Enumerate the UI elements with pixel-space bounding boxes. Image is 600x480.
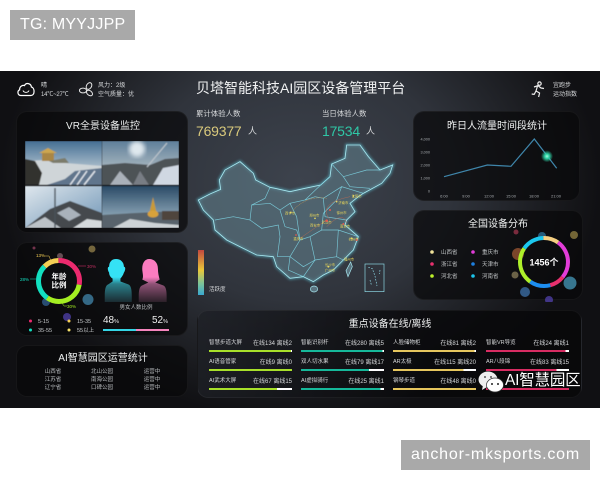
table: operations	[45, 368, 160, 391]
device rows: 在线67 离线15	[253, 379, 292, 385]
line chart: 3,000	[420, 150, 430, 154]
hot spots and labels: 南京市	[340, 223, 351, 228]
device rows: 在线81 离线2	[440, 341, 476, 347]
device rows: 在线134 离线2	[253, 341, 292, 347]
stat: cumulative visitors	[196, 109, 257, 139]
hot spots and labels: 福州市	[344, 257, 355, 262]
panel: national device distribution	[413, 210, 583, 300]
wind text: 风力：2级	[98, 83, 125, 89]
province borders	[215, 164, 380, 277]
hot spots and labels: 徐州市	[337, 210, 347, 215]
device rows: 在线115 离线20	[434, 360, 476, 366]
device rows: 智慧步道大屏	[209, 340, 242, 346]
table: operations: 运营中	[144, 369, 160, 375]
device rows: 在线9 离线0	[260, 360, 292, 366]
south china sea inset	[365, 264, 384, 292]
map of China	[196, 142, 396, 292]
heading: 全国设备分布	[468, 219, 528, 230]
line chart: 4,000	[420, 138, 430, 142]
device rows: AR太极	[393, 359, 412, 365]
device rows: 双人切水果	[301, 359, 329, 365]
stat value: 769377	[196, 123, 242, 139]
device rows: AI虚拟骑行	[301, 378, 328, 384]
heading: 昨日人流量时间段统计	[447, 121, 547, 132]
gender ratio bar	[103, 329, 169, 331]
sport index block	[532, 81, 577, 98]
line chart	[420, 138, 562, 198]
icon: fan	[79, 82, 93, 96]
line chart: 0	[428, 190, 430, 194]
icon: runner	[532, 81, 544, 98]
panel: yesterday traffic	[413, 111, 580, 201]
photo: golden pagoda	[102, 186, 179, 228]
female percent: 52%	[152, 315, 168, 326]
dashboard screen	[0, 71, 600, 408]
device rows: 智能识别杆	[301, 340, 329, 346]
watermark: WeChat AI智慧园区	[478, 372, 580, 392]
hot spots and labels: 济南市	[338, 200, 349, 205]
table: operations: 口碑公园	[91, 385, 113, 391]
chart: age donut with bubbles	[20, 246, 96, 321]
icon: WeChat bubbles	[478, 372, 504, 392]
table: operations: 山西省	[45, 369, 61, 375]
panel: operations statistics	[16, 345, 188, 397]
icon: cloud	[17, 82, 35, 96]
stat label: 当日体验人数	[322, 109, 366, 118]
hot spots and labels: 郑州市	[309, 213, 320, 218]
hot spots and labels	[285, 193, 362, 272]
device rows: 钢琴步道	[393, 378, 415, 384]
tag: TG label: TG: MYYJJPP	[20, 16, 125, 33]
device rows: AI语音管家	[209, 359, 236, 365]
device rows: AR八段锦	[486, 359, 510, 365]
legend	[430, 248, 499, 280]
heading: 重点设备在线/离线	[349, 319, 431, 330]
activity legend bar	[198, 250, 204, 295]
hot spots and labels: 沈阳市	[352, 193, 362, 198]
hot spots and labels: 广州市	[325, 267, 336, 272]
hot spots and labels: 重庆市	[293, 236, 304, 241]
hot spots and labels: 长沙市	[325, 262, 336, 267]
stat unit: 人	[248, 126, 257, 136]
line chart: 6:00	[440, 194, 449, 198]
panel: key device status	[197, 310, 582, 398]
device rows	[209, 338, 569, 390]
line chart: 12:00	[484, 194, 495, 198]
table: operations: 辽宁省	[45, 385, 61, 391]
photo: snowy trees	[25, 186, 102, 228]
device rows: 人脸储物柜	[393, 340, 421, 346]
legend: 山西省	[441, 248, 458, 256]
panel: age and gender ratio	[16, 242, 188, 336]
stat: daily visitors	[322, 109, 375, 139]
hot spots and labels: 西安市	[310, 223, 321, 228]
temperature: 14℃~27℃	[41, 92, 68, 98]
hainan and taiwan	[310, 262, 352, 292]
hot spots and labels: 西宁市	[285, 211, 296, 216]
age legend	[29, 319, 95, 334]
chart: age donut with bubbles: 30%	[87, 264, 96, 269]
device rows: AI武术大屏	[209, 378, 236, 384]
table: operations: 江苏省	[45, 377, 61, 383]
line chart: 2,000	[420, 164, 430, 168]
tag: site address: anchor-mksports.com	[411, 446, 580, 463]
legend: 浙江省	[441, 260, 458, 268]
device rows: 在线83 离线15	[530, 360, 569, 366]
activity legend label: 活跃度	[209, 287, 226, 293]
device rows: 智能VR导览	[486, 340, 516, 346]
table: operations: 南海公园	[91, 377, 113, 383]
gender ratio label: 男女人数比例	[119, 305, 153, 311]
line chart: 1,000	[420, 176, 430, 180]
heading: AI智慧园区运营统计	[58, 353, 148, 364]
device rows: 在线24 离线1	[533, 341, 569, 347]
hot spots and labels: 杭州市	[349, 237, 359, 242]
line chart: 15:00	[506, 194, 517, 198]
panel: VR monitoring	[16, 111, 188, 233]
tag: TG label	[10, 10, 135, 40]
device rows: 在线25 离线1	[348, 379, 384, 385]
legend: 重庆市	[482, 248, 499, 256]
photo: sun and rocks	[102, 141, 179, 185]
map land	[198, 145, 393, 282]
photo: temple on snowy peak	[25, 141, 102, 185]
line chart: 9:00	[462, 194, 471, 198]
chart: age donut with bubbles: 28%	[20, 277, 29, 282]
legend: 天津市	[482, 260, 499, 268]
hot spots and labels: 武汉市	[322, 219, 332, 224]
age legend: 55以上	[77, 326, 95, 334]
tag: site address	[401, 440, 590, 470]
chart: age donut with bubbles: 比例	[52, 280, 67, 290]
photo grid	[25, 141, 179, 228]
device rows: 在线48 离线0	[440, 379, 476, 385]
line chart: 18:00	[529, 194, 540, 198]
map outline glow	[198, 145, 393, 282]
age legend: 35-55	[38, 328, 52, 334]
donut chart with bubbles	[512, 230, 578, 302]
air quality text: 空气质量：优	[98, 92, 134, 98]
table: operations: 北山公园	[91, 369, 113, 375]
chart: age donut with bubbles: 年龄	[52, 271, 67, 281]
heading: VR全景设备监控	[66, 121, 140, 132]
weather text: 晴	[41, 83, 47, 89]
age legend: 5-15	[38, 319, 49, 325]
table: operations: 运营中	[144, 377, 160, 383]
chart: age donut with bubbles: 13%	[36, 253, 45, 258]
watermark text: AI智慧园区	[505, 372, 580, 389]
stat label: 累计体验人数	[196, 109, 240, 118]
title: 贝塔智能科技AI园区设备管理平台	[196, 80, 405, 96]
device rows: 在线280 离线5	[345, 341, 384, 347]
icon: gender silhouettes	[104, 259, 167, 302]
table: operations: 运营中	[144, 385, 160, 391]
donut chart with bubbles: 1456个	[529, 258, 559, 268]
male percent: 48%	[103, 315, 119, 326]
age legend: 15-35	[77, 319, 91, 325]
stat value: 17534	[322, 123, 360, 139]
legend: 河南省	[482, 272, 499, 280]
sport index text: 运动指数	[553, 92, 577, 98]
device rows: 在线79 离线17	[345, 360, 384, 366]
stat unit: 人	[366, 126, 375, 136]
weather block	[17, 82, 134, 98]
sport text: 宜跑步	[553, 83, 571, 89]
line chart: 21:00	[551, 194, 562, 198]
chart: age donut with bubbles: 30%	[67, 304, 76, 309]
legend: 河北省	[441, 272, 458, 280]
